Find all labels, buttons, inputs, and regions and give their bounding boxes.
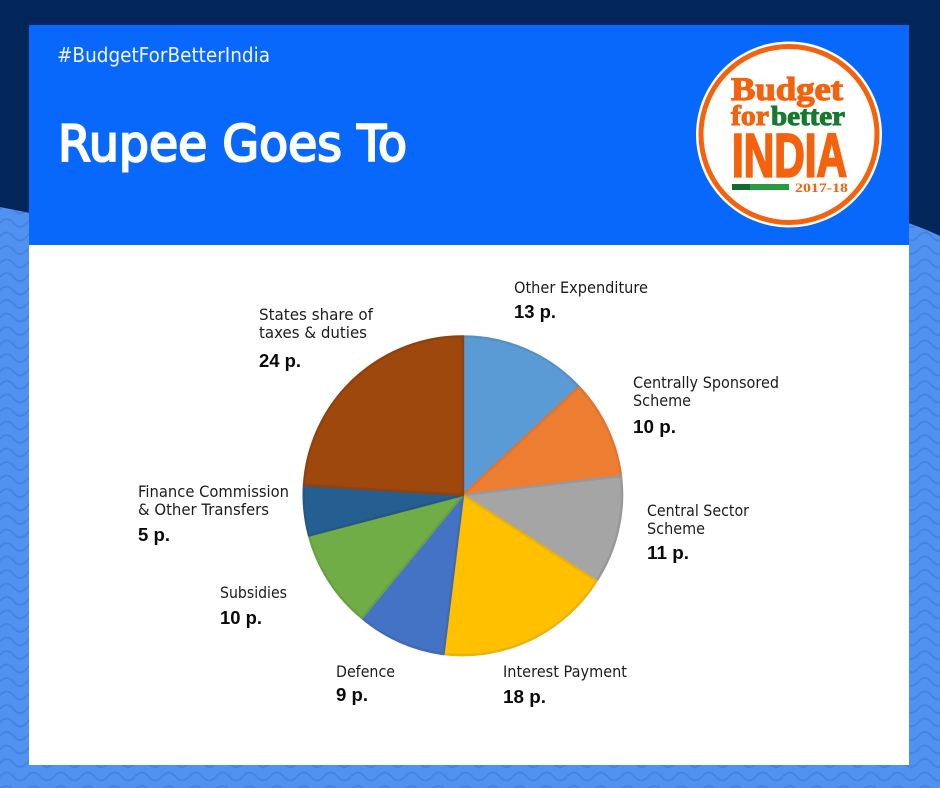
label: defence: Defence xyxy=(336,662,395,681)
slice: defence xyxy=(362,495,463,654)
label: central sector scheme: Central Sector xyxy=(647,501,749,520)
label: subsidies: Subsidies xyxy=(220,583,287,602)
label: states share: taxes & duties xyxy=(259,323,367,342)
label: interest payment: Interest Payment xyxy=(503,662,627,681)
logo: Budget for better India: for xyxy=(731,101,769,132)
label: other expenditure: Other Expenditure xyxy=(514,278,648,297)
label: centrally sponsored scheme: 10 p. xyxy=(633,416,676,437)
label: subsidies: 10 p. xyxy=(220,607,262,628)
label: central sector scheme: Scheme xyxy=(647,519,705,538)
label: interest payment: 18 p. xyxy=(503,686,546,707)
logo: Budget for better India: INDIA xyxy=(732,122,847,190)
panel: chart xyxy=(29,245,909,765)
logo: Budget for better India: 2017-18 xyxy=(795,180,849,195)
logo: Budget for better India: better xyxy=(771,101,845,131)
label: states share: 24 p. xyxy=(259,350,301,371)
label: interest payment xyxy=(503,662,627,707)
logo: Budget for better India xyxy=(696,42,882,228)
slice: centrally sponsored xyxy=(463,387,621,495)
slice: interest payment xyxy=(444,495,596,655)
label: defence xyxy=(336,662,395,705)
label: finance commission: 5 p. xyxy=(138,524,170,545)
label: finance commission: Finance Commission xyxy=(138,482,289,501)
slice: states share xyxy=(304,336,463,495)
label: other expenditure xyxy=(514,278,648,322)
label: finance commission xyxy=(138,482,289,545)
logo: Budget for better India: Budget xyxy=(731,72,843,108)
label: central sector scheme: 11 p. xyxy=(647,542,689,563)
slice: central sector xyxy=(463,476,622,581)
slice: subsidies xyxy=(309,495,463,618)
title: Rupee Goes To xyxy=(58,115,407,173)
label: other expenditure: 13 p. xyxy=(514,301,556,322)
slice: finance commission xyxy=(304,485,463,536)
label: states share: States share of xyxy=(259,305,373,324)
label: defence: 9 p. xyxy=(336,684,368,705)
label: central sector scheme xyxy=(647,501,749,563)
label: centrally sponsored scheme: Centrally Sponsored xyxy=(633,373,779,392)
slice: other expenditure xyxy=(463,336,579,495)
label: subsidies xyxy=(220,583,287,628)
pie chart xyxy=(304,336,622,655)
hashtag: #BudgetForBetterIndia xyxy=(57,43,270,67)
label: states share xyxy=(259,305,373,371)
panel: header xyxy=(29,25,909,245)
label: finance commission: & Other Transfers xyxy=(138,500,269,519)
label: centrally sponsored scheme: Scheme xyxy=(633,391,691,410)
label: centrally sponsored scheme xyxy=(633,373,779,437)
